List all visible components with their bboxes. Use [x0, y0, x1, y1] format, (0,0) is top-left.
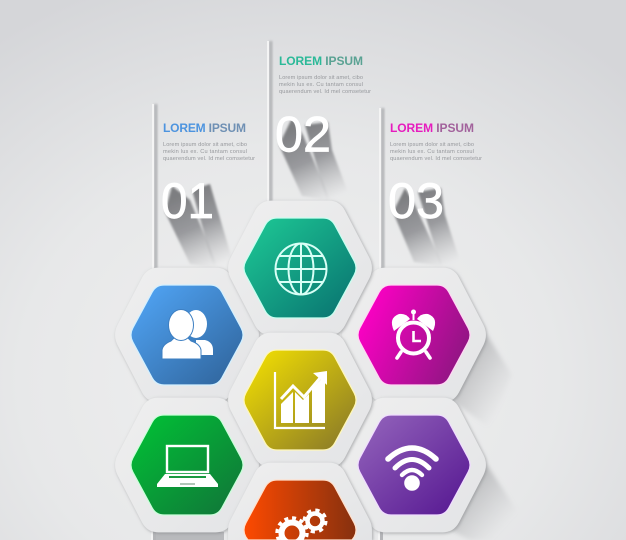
number 02	[275, 106, 354, 208]
number 03: 03	[388, 173, 444, 229]
hexagon: laptop	[115, 398, 259, 532]
text block 02: quaerendum vel. Id mel comsetetur	[279, 89, 371, 95]
hexagon: wifi	[342, 398, 486, 532]
icon: laptop	[157, 446, 218, 487]
vertical line 1	[152, 104, 158, 274]
number 03	[388, 173, 461, 266]
hexagon: alarm clock	[342, 268, 486, 402]
hexagon: chart	[228, 333, 372, 467]
icon: chart	[275, 371, 327, 428]
hexagon: people	[115, 268, 259, 402]
number 01: 01	[161, 173, 214, 229]
vertical line 3	[379, 108, 384, 273]
number 01	[161, 173, 236, 272]
vertical line 2	[267, 41, 272, 211]
hexagon: globe	[228, 201, 372, 335]
text block 02: LOREM IPSUM	[279, 54, 363, 68]
text block 03: mekin lus ex. Cu tantam consul	[390, 149, 474, 155]
plate long shadows	[452, 335, 520, 540]
text block 02: mekin lus ex. Cu tantam consul	[279, 82, 363, 88]
icon: people	[162, 310, 213, 359]
text block 02	[279, 54, 371, 95]
text block 03: LOREM IPSUM	[390, 121, 474, 135]
hexagon: gears	[228, 463, 372, 540]
icon: gears	[275, 508, 328, 540]
text block 03: Lorem ipsum dolor sit amet, cibo	[390, 142, 474, 148]
text block 03: quaerendum vel. Id mel comsetetur	[390, 156, 482, 162]
text block 01: Lorem ipsum dolor sit amet, cibo	[163, 142, 247, 148]
number 02: 02	[275, 106, 331, 162]
text block 01: quaerendum vel. Id mel comsetetur	[163, 156, 255, 162]
text block 01	[163, 121, 255, 162]
icon: wifi	[388, 448, 436, 491]
text block 03	[390, 121, 482, 162]
icon: globe	[276, 244, 326, 294]
text block 02: Lorem ipsum dolor sit amet, cibo	[279, 75, 363, 81]
lower line stubs	[151, 525, 383, 540]
text block 01: LOREM IPSUM	[163, 121, 246, 135]
icon: alarm clock	[392, 310, 435, 358]
text block 01: mekin lus ex. Cu tantam consul	[163, 149, 247, 155]
